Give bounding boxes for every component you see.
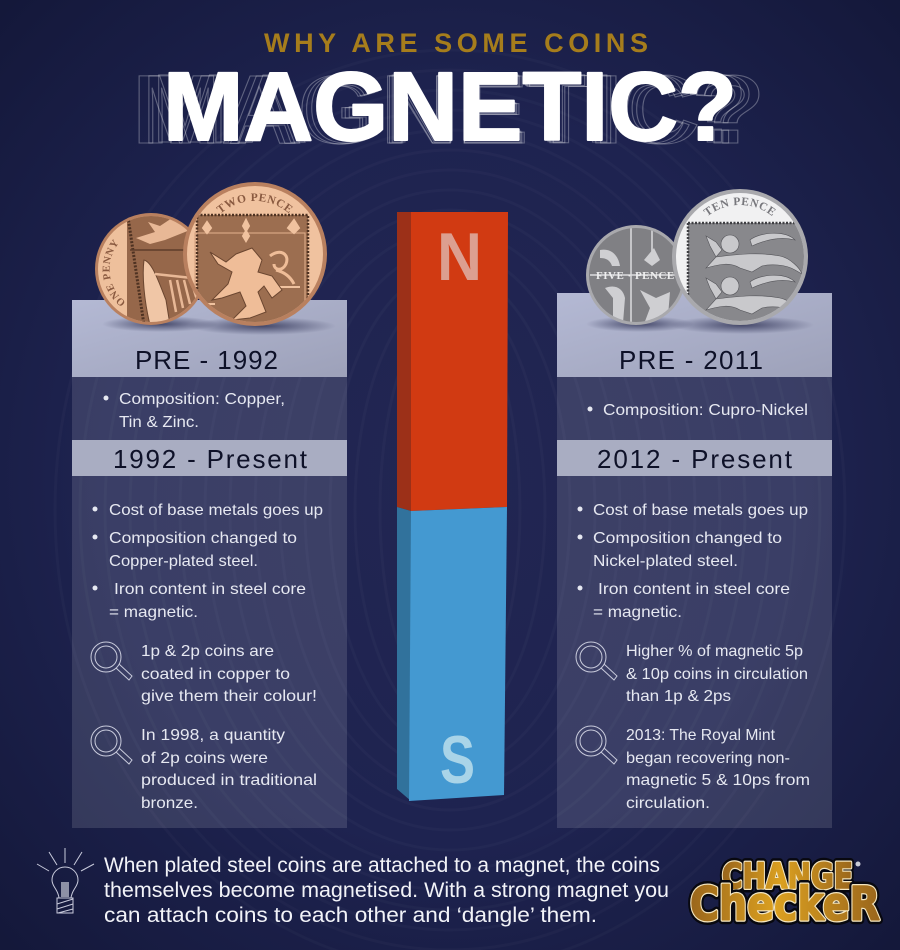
text: 1992-present bullets: Composition changed to <box>109 530 297 547</box>
text: 1998 bronze fact <box>141 727 317 812</box>
coins: five pence and ten pence <box>586 189 808 334</box>
north pole <box>397 212 508 511</box>
text: pre-1992 composition: Tin & Zinc. <box>119 414 199 431</box>
text: circulation fact <box>626 643 808 705</box>
logo: Change Checker: CHANGE <box>722 857 853 897</box>
text: circulation fact: than 1p & 2ps <box>626 688 731 705</box>
header band: pre-2011 <box>557 293 832 377</box>
icon: one penny coin <box>95 213 198 325</box>
text: 1992-present bullets: Copper-plated steel. <box>109 553 258 570</box>
text: pre-1992 composition <box>104 391 285 431</box>
south pole <box>397 507 507 801</box>
header band: 2012-present <box>557 440 832 476</box>
label: S: S <box>440 722 475 798</box>
text: copper coating fact <box>141 643 317 705</box>
text: 2012-present bullets: = magnetic. <box>593 604 682 621</box>
title: MAGNETIC?: MAGNETIC? <box>152 54 747 163</box>
logo: Change Checker: CHANGE <box>722 857 853 897</box>
bar magnet <box>397 212 508 801</box>
panel: silver coins <box>557 293 832 828</box>
icon: ten pence coin <box>672 189 808 325</box>
header band: 1992-present <box>72 440 347 476</box>
title: MAGNETIC?: MAGNETIC? <box>132 55 765 164</box>
text: copper coating fact: 1p & 2p coins are <box>141 643 274 660</box>
heading: 2012-present: 2012 - Present <box>597 444 793 474</box>
text: 2012-present bullets: Nickel-plated steel. <box>593 553 738 570</box>
coin inscription: ten pence: TEN PENCE <box>703 197 776 216</box>
coins: one penny and two pence <box>95 182 330 334</box>
text: magnetised coins explanation: When plated steel coins are attached to a magnet, the coins <box>104 854 660 877</box>
text: 2012-present bullets: Cost of base metals goes up <box>593 502 808 519</box>
panel: copper coins <box>72 300 347 828</box>
icon: magnifier <box>576 726 617 764</box>
icon: light bulb <box>37 848 94 913</box>
text: 1992-present bullets: Iron content in steel core <box>114 581 306 598</box>
icon: magnifier <box>576 642 617 680</box>
text: pre-1992 composition: Composition: Copper, <box>119 391 285 408</box>
text: copper coating fact: give them their colour! <box>141 688 317 705</box>
text: 2012-present bullets: Composition changed to <box>593 530 782 547</box>
label: N: N <box>437 219 482 295</box>
title: MAGNETIC?: MAGNETIC? <box>142 55 755 164</box>
text: 1998 bronze fact: produced in traditional <box>141 772 317 789</box>
lion bottom <box>706 275 802 316</box>
text: magnetised coins explanation: can attach coins to each other and ‘dangle’ them. <box>104 904 597 927</box>
logo: Change Checker: CHANGE <box>722 857 853 897</box>
logo: Change Checker <box>690 857 880 931</box>
text: 1998 bronze fact: In 1998, a quantity <box>141 727 285 744</box>
text: magnetised coins explanation <box>104 854 669 927</box>
header band: pre-1992 <box>72 300 347 377</box>
text: Royal Mint fact: circulation. <box>626 795 710 812</box>
coin inscription: five pence: FIVE · PENCE <box>596 270 675 282</box>
heading: pre-1992: PRE - 1992 <box>135 345 278 375</box>
lion <box>210 248 282 320</box>
icon: magnifier <box>91 726 132 764</box>
text: Royal Mint fact <box>626 727 810 812</box>
text: 1992-present bullets: Cost of base metals goes up <box>109 502 323 519</box>
text: 2012-present bullets: Iron content in steel core <box>598 581 790 598</box>
text: 1992-present bullets: = magnetic. <box>109 604 198 621</box>
subtitle: WHY ARE SOME COINS <box>264 28 648 58</box>
text: magnetised coins explanation: themselves become magnetised. With a strong magnet you <box>104 879 669 902</box>
text: Royal Mint fact: began recovering non- <box>626 750 790 767</box>
coin inscription: one penny: ONE PENNY <box>102 239 124 306</box>
text: circulation fact: Higher % of magnetic 5p <box>626 643 803 660</box>
text: Royal Mint fact: magnetic 5 & 10ps from <box>626 772 810 789</box>
text: 1992-present bullets <box>92 502 323 621</box>
text: circulation fact: & 10p coins in circulation <box>626 666 808 683</box>
text: copper coating fact: coated in copper to <box>141 666 290 683</box>
text: 1998 bronze fact: bronze. <box>141 795 198 812</box>
icon: five pence coin <box>586 225 686 325</box>
icon: magnifier <box>91 642 132 680</box>
text: 2012-present bullets <box>578 502 808 621</box>
heading: pre-2011: PRE - 2011 <box>619 345 763 375</box>
coin inscription: two pence: TWO PENCE <box>216 194 293 213</box>
text: 1998 bronze fact: of 2p coins were <box>141 750 268 767</box>
text: Royal Mint fact: 2013: The Royal Mint <box>626 727 776 744</box>
icon: two pence coin <box>183 182 327 326</box>
text: pre-2011 composition: Composition: Cupro-Nickel <box>603 402 808 419</box>
title: MAGNETIC?: MAGNETIC? <box>163 52 737 161</box>
lion top <box>706 233 802 274</box>
heading: 1992-present: 1992 - Present <box>113 444 308 474</box>
